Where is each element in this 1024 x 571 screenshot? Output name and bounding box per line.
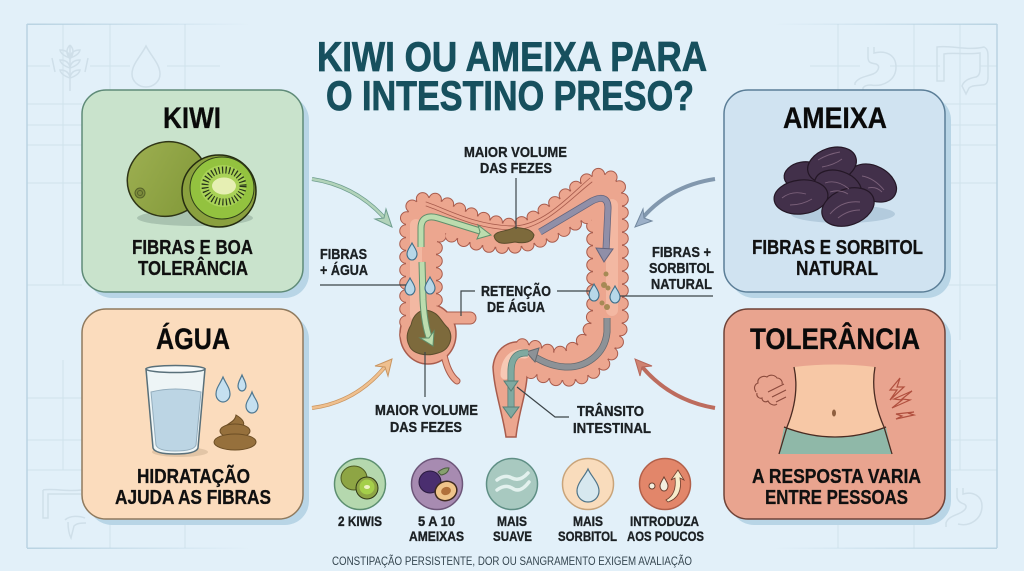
text: 5 a 10 ameixas: [409, 513, 464, 544]
icon: glass of water: [146, 366, 208, 457]
label: maior volume bottom: DAS FEZES: [390, 419, 462, 436]
text: mais suave: MAIS: [497, 513, 527, 529]
label: fibras sorbitol: FIBRAS +: [652, 244, 711, 261]
heading: tolerancia: TOLERÂNCIA: [750, 322, 920, 356]
label: retencao de agua: RETENÇÃO: [481, 282, 551, 300]
arrow: ameixa to colon: [635, 179, 715, 227]
label: fibras sorbitol: SORBITOL: [649, 260, 714, 277]
icon row: introduza aos poucos: [627, 458, 704, 544]
stool in transverse colon: [494, 227, 534, 243]
text: 2 kiwis: 2 KIWIS: [338, 513, 382, 529]
text: mais sorbitol: SORBITOL: [558, 528, 617, 544]
text: introduza aos poucos: [627, 513, 704, 544]
icon row: mais suave: [486, 458, 538, 544]
stool specks: [600, 272, 610, 310]
text: tolerancia caption: ENTRE PESSOAS: [765, 487, 908, 509]
text: ameixa caption: FIBRAS E SORBITOL: [752, 237, 923, 259]
label: retencao de agua: DE ÁGUA: [487, 299, 545, 316]
text: 5 a 10 ameixas: AMEIXAS: [409, 528, 464, 544]
label: retencao de agua: [461, 282, 590, 316]
text: kiwi caption: TOLERÂNCIA: [138, 256, 248, 280]
label: maior volume top: [464, 144, 567, 229]
panel: tolerancia: [724, 309, 951, 525]
panel: kiwi: [82, 90, 309, 298]
text: ameixa caption: [752, 237, 923, 280]
arrow: agua to colon: [312, 359, 392, 408]
panel: ameixa: [724, 90, 951, 298]
text: mais sorbitol: [558, 513, 617, 544]
icon: background stomach: [855, 47, 896, 90]
text: introduza aos poucos: INTRODUZA: [630, 513, 699, 529]
label: fibras agua: + ÁGUA: [320, 262, 368, 279]
icon row: 2 kiwis: [334, 458, 386, 529]
icon: background wheat: [52, 45, 88, 91]
label: fibras sorbitol: [620, 244, 714, 296]
icon: abdomen: [779, 364, 892, 454]
title: KIWI OU AMEIXA PARA: [317, 33, 707, 80]
arrow: kiwi to colon: [312, 179, 392, 227]
icon: background colon bottom left: [43, 489, 86, 538]
title: [317, 33, 707, 119]
title: O INTESTINO PRESO?: [326, 72, 694, 119]
label: fibras agua: [320, 246, 406, 285]
text: 5 a 10 ameixas: 5 A 10: [418, 513, 455, 529]
panel: agua: [82, 309, 309, 525]
label: fibras sorbitol: NATURAL: [651, 276, 712, 293]
icon: gas cloud: [755, 375, 786, 405]
diagram: colon: [400, 174, 622, 437]
icon row: mais sorbitol: [558, 458, 617, 544]
arrow: green top: [421, 217, 491, 247]
icon: prunes: [772, 141, 903, 233]
stool in cecum: [407, 310, 451, 355]
label: maior volume bottom: [375, 352, 478, 436]
footer note: CONSTIPAÇÃO PERSISTENTE, DOR OU SANGRAMENTO EXIGEM AVALIAÇÃO: [332, 554, 692, 568]
label: fibras agua: FIBRAS: [320, 246, 367, 263]
text: agua caption: [115, 465, 271, 509]
arrow: gray: [526, 318, 607, 367]
icon: background stomach bottom right: [946, 488, 982, 527]
text: kiwi caption: FIBRAS E BOA: [132, 237, 253, 259]
text: agua caption: AJUDA AS FIBRAS: [115, 487, 271, 509]
text: tolerancia caption: [752, 466, 921, 509]
text: ameixa caption: NATURAL: [796, 258, 878, 280]
arrow: tolerancia to colon: [635, 359, 715, 408]
icon: background water drop: [132, 46, 160, 87]
label: transito intestinal: [517, 387, 651, 437]
label: transito intestinal: INTESTINAL: [573, 420, 651, 437]
heading: agua: ÁGUA: [156, 322, 230, 356]
arrow: purple: [540, 198, 613, 262]
icon: stool: [214, 415, 256, 450]
water drops in colon: [405, 243, 620, 303]
heading: kiwi: KIWI: [163, 102, 221, 135]
icon: water drops: [216, 375, 258, 413]
label: maior volume bottom: MAIOR VOLUME: [375, 402, 478, 419]
text: introduza aos poucos: AOS POUCOS: [627, 528, 704, 544]
text: agua caption: HIDRATAÇÃO: [137, 465, 250, 488]
icon: pain bolts: [890, 378, 914, 419]
label: maior volume top: MAIOR VOLUME: [464, 144, 567, 161]
icon: kiwi fruit: [118, 131, 256, 227]
text: mais sorbitol: MAIS: [573, 513, 603, 529]
icon: background colon: [937, 47, 988, 94]
label: maior volume top: DAS FEZES: [480, 160, 552, 177]
text: kiwi caption: [132, 237, 253, 280]
text: mais suave: [493, 513, 532, 544]
text: tolerancia caption: A RESPOSTA VARIA: [752, 466, 921, 488]
colon body: [400, 174, 622, 437]
text: mais suave: SUAVE: [493, 528, 532, 544]
arrow: green down: [420, 262, 434, 346]
heading: ameixa: AMEIXA: [783, 102, 887, 135]
arrow: teal: [503, 353, 528, 418]
icon row: 5 a 10 ameixas: [409, 458, 464, 544]
label: transito intestinal: TRÂNSITO: [577, 402, 644, 420]
